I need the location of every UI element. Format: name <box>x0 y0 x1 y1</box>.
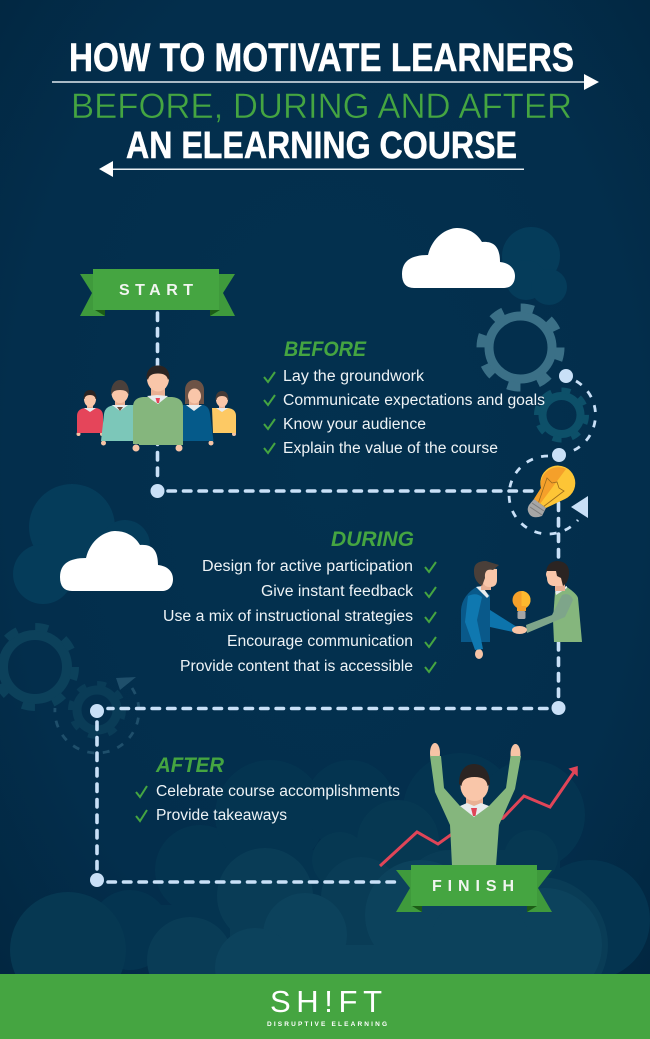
arrow: title left <box>99 161 524 177</box>
ribbon label: finish: FINISH <box>432 878 514 895</box>
list: after <box>156 783 400 824</box>
list: during <box>163 558 413 675</box>
arrow: triangle by bulb <box>571 496 588 518</box>
ribbon: start <box>80 269 235 316</box>
icon: large gear top right <box>481 308 560 387</box>
person: red <box>76 390 104 436</box>
list: before: Communicate expectations and goals <box>283 392 545 409</box>
footer bar <box>0 974 650 1039</box>
list: during: Use a mix of instructional strategies <box>163 608 413 625</box>
icon: white cloud left <box>60 531 173 591</box>
dashed route <box>97 313 558 882</box>
people group <box>76 366 236 452</box>
list: before: Lay the groundwork <box>283 368 424 385</box>
list: during: Provide content that is accessible <box>180 658 413 675</box>
section: after <box>136 754 400 824</box>
title: an elearning course: AN ELEARNING COURSE <box>126 125 517 167</box>
icon: small gear top right <box>537 390 586 440</box>
list: during: Give instant feedback <box>261 583 413 600</box>
icon: gear large lower left <box>0 627 75 707</box>
hands <box>512 626 527 634</box>
background clouds: bottom <box>10 753 650 1013</box>
logo: shift: SH!FT <box>270 984 382 1019</box>
ribbon: finish <box>396 865 552 912</box>
heading: during: DURING <box>331 528 414 551</box>
list: after: Provide takeaways <box>156 807 287 824</box>
icon: gear small lower left <box>71 684 123 736</box>
dashed arc and arrow lower left <box>55 677 139 753</box>
person: blue <box>183 380 214 446</box>
man right <box>526 561 582 642</box>
ribbon label: start: START <box>119 282 193 299</box>
section: during <box>163 528 436 675</box>
person: green centre <box>132 366 183 452</box>
line chart arrow <box>380 767 577 866</box>
logo tagline: DISRUPTIVE ELEARNING <box>267 1021 387 1028</box>
subtitle: before, during and after: BEFORE, DURING AND AFTER <box>71 87 572 126</box>
list: during: Design for active participation <box>202 558 413 575</box>
heading: before: BEFORE <box>284 338 367 361</box>
icon: light bulb <box>528 466 575 517</box>
arrow: title right <box>52 74 599 90</box>
list: before: Know your audience <box>283 416 426 433</box>
list: before <box>283 368 545 457</box>
checks: before <box>264 372 275 453</box>
icon: handshake <box>461 561 582 659</box>
person: celebrating <box>430 743 521 866</box>
dashed circle around bulb <box>509 456 578 534</box>
section: before <box>264 338 545 457</box>
heading: after: AFTER <box>155 754 225 777</box>
icon: white cloud top <box>402 228 515 288</box>
list: before: Explain the value of the course <box>283 440 498 457</box>
checks: during <box>425 562 436 672</box>
background clouds: left <box>13 484 150 604</box>
small bulb <box>512 591 530 619</box>
list: during: Encourage communication <box>227 633 413 650</box>
checks: after <box>136 786 147 821</box>
list: after: Celebrate course accomplishments <box>156 783 400 800</box>
man left <box>461 561 517 659</box>
background clouds: top right <box>502 227 567 305</box>
person: teal <box>101 380 136 446</box>
route nodes <box>90 369 573 887</box>
person: yellow <box>212 391 236 436</box>
dashed arc around small gear <box>570 381 596 452</box>
